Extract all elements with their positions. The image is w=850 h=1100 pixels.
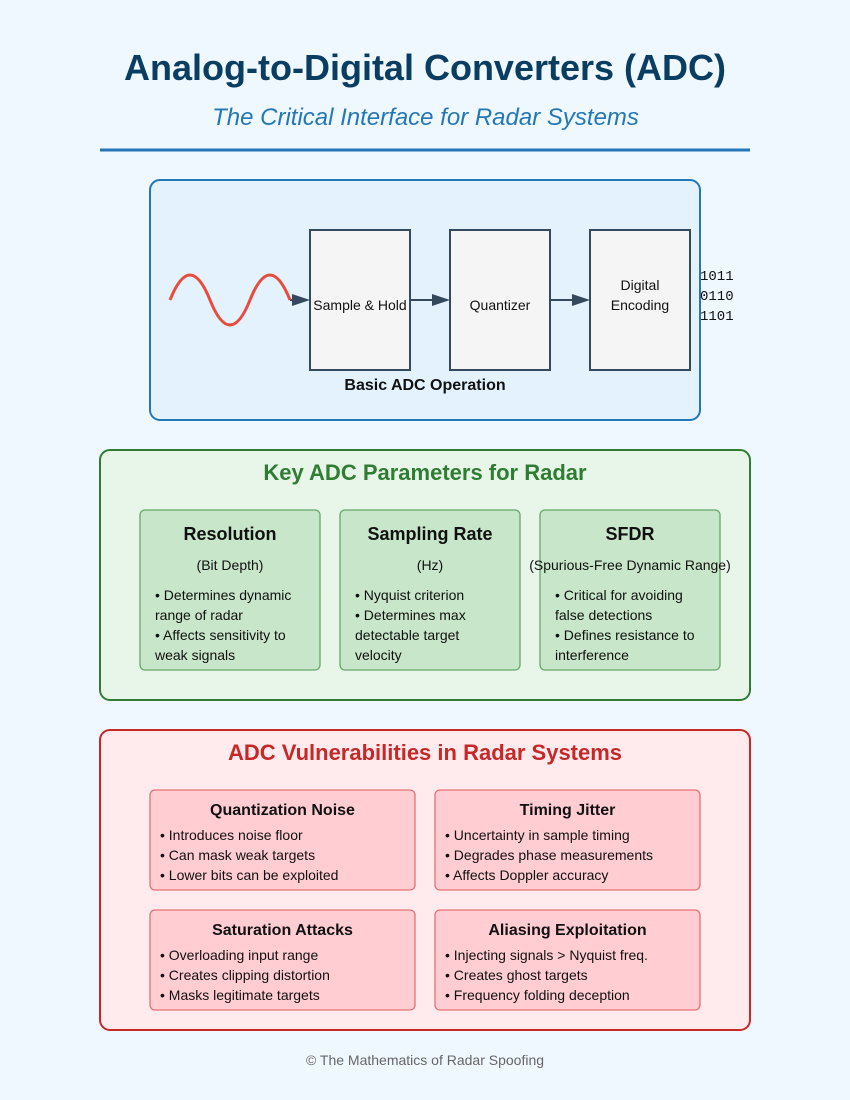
- card: resolution: • Determines dynamic: [155, 587, 291, 603]
- title: Analog-to-Digital Converters (ADC): [124, 47, 726, 88]
- panel: ADC vulnerabilities: [100, 730, 750, 1030]
- card: SFDR: (Spurious-Free Dynamic Range): [529, 557, 731, 573]
- card: quantization noise: • Introduces noise floor: [160, 827, 303, 843]
- card: sampling rate: velocity: [355, 647, 402, 663]
- card: aliasing exploitation: [435, 910, 700, 1010]
- diagram caption: Basic ADC Operation: [344, 377, 506, 394]
- digital output bits: 1011: [700, 269, 734, 285]
- card: saturation attacks: • Overloading input range: [160, 947, 318, 963]
- card: resolution: (Bit Depth): [197, 557, 263, 573]
- card: saturation attacks: [150, 910, 415, 1010]
- card: quantization noise: [150, 790, 415, 890]
- card: timing jitter: Timing Jitter: [520, 802, 615, 819]
- card: saturation attacks: • Creates clipping distortion: [160, 967, 330, 983]
- card: resolution: range of radar: [155, 607, 243, 623]
- card: sampling rate: [340, 510, 520, 670]
- card: SFDR: [529, 510, 731, 670]
- card: quantization noise: • Can mask weak targets: [160, 847, 315, 863]
- card: quantization noise: Quantization Noise: [210, 802, 355, 819]
- card: sampling rate: detectable target: [355, 627, 459, 643]
- heading: parameters: Key ADC Parameters for Radar: [263, 460, 587, 485]
- card: saturation attacks: Saturation Attacks: [212, 922, 353, 939]
- subtitle: The Critical Interface for Radar Systems: [212, 104, 639, 131]
- card: sampling rate: • Nyquist criterion: [355, 587, 464, 603]
- block: digital encoding: [590, 230, 690, 370]
- card: sampling rate: Sampling Rate: [367, 524, 493, 544]
- card: sampling rate: • Determines max: [355, 607, 466, 623]
- digital output bits: 1101: [700, 309, 734, 325]
- block: digital encoding: Digital: [621, 277, 659, 293]
- block: digital encoding: Encoding: [611, 297, 669, 313]
- card: aliasing exploitation: • Frequency folding deception: [445, 987, 630, 1003]
- block: quantizer: Quantizer: [470, 297, 531, 313]
- arrow: signal to sample and hold: [290, 299, 292, 301]
- card: resolution: [140, 510, 320, 670]
- card: SFDR: • Defines resistance to: [555, 627, 695, 643]
- card: timing jitter: • Uncertainty in sample timing: [445, 827, 630, 843]
- card: resolution: • Affects sensitivity to: [155, 627, 286, 643]
- arrow: quantizer to encoding: [550, 299, 572, 301]
- card: timing jitter: • Degrades phase measurements: [445, 847, 653, 863]
- footer: © The Mathematics of Radar Spoofing: [306, 1052, 544, 1068]
- card: resolution: weak signals: [154, 647, 235, 663]
- panel: basic ADC operation: [150, 180, 734, 420]
- card: SFDR: • Critical for avoiding: [555, 587, 683, 603]
- card: quantization noise: • Lower bits can be exploited: [160, 867, 338, 883]
- card: sampling rate: (Hz): [417, 557, 443, 573]
- digital output bits: [700, 269, 734, 325]
- block: sample and hold: [310, 230, 410, 370]
- card: SFDR: false detections: [555, 607, 652, 623]
- card: aliasing exploitation: • Injecting signals > Nyquist freq.: [445, 947, 648, 963]
- panel: key ADC parameters: [100, 450, 750, 700]
- card: aliasing exploitation: Aliasing Exploitation: [488, 922, 647, 939]
- block: sample and hold: Sample & Hold: [313, 297, 407, 313]
- card: timing jitter: [435, 790, 700, 890]
- card: aliasing exploitation: • Creates ghost targets: [445, 967, 588, 983]
- card: resolution: Resolution: [184, 524, 276, 544]
- heading: vulnerabilities: ADC Vulnerabilities in Radar Systems: [228, 740, 622, 765]
- card: saturation attacks: • Masks legitimate targets: [160, 987, 320, 1003]
- card: SFDR: interference: [555, 647, 629, 663]
- icon: analog sine wave: [170, 275, 290, 325]
- block: quantizer: [450, 230, 550, 370]
- card: SFDR: SFDR: [606, 524, 654, 544]
- card: timing jitter: • Affects Doppler accuracy: [445, 867, 608, 883]
- arrow: sample and hold to quantizer: [410, 299, 432, 301]
- digital output bits: 0110: [700, 289, 734, 305]
